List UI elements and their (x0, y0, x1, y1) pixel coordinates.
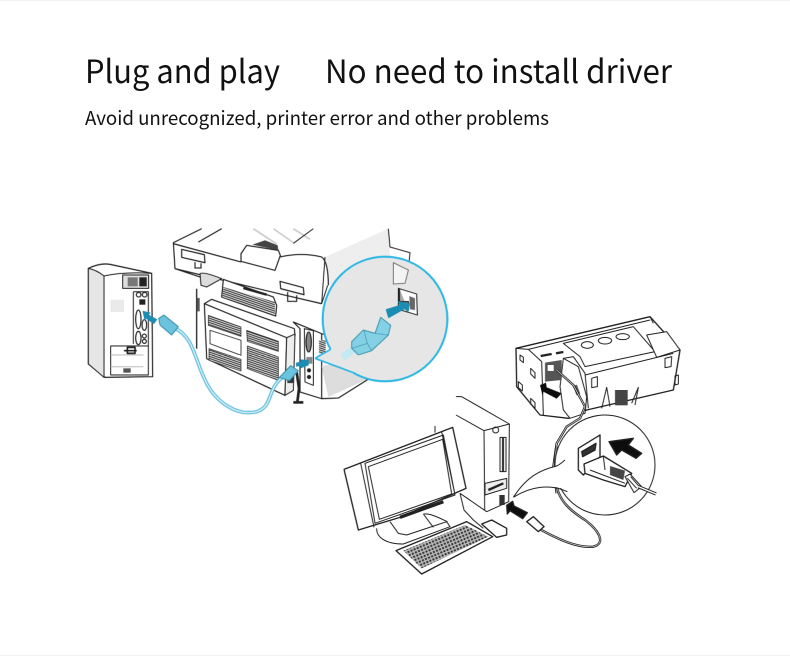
monitor (344, 426, 483, 544)
subtitle: Avoid unrecognized, printer error and other problems (85, 104, 549, 131)
illustration: computer and multifunction printer with blue USB cable (88, 229, 447, 413)
plug arrow (507, 501, 527, 519)
printer body (173, 229, 410, 402)
keyboard (396, 522, 493, 574)
computer tower (88, 264, 153, 377)
mouse (482, 520, 507, 537)
title: Plug and play (85, 47, 280, 93)
title (85, 47, 673, 93)
illustration: desktop computer and inkjet printer with USB cable (344, 317, 680, 574)
magnified USB port callout (513, 415, 656, 515)
inkjet printer (516, 317, 680, 493)
USB cable (527, 447, 600, 547)
magnified connector callout (315, 257, 447, 381)
computer tower (455, 397, 509, 512)
title: No need to install driver (325, 47, 673, 93)
blue USB cable (142, 311, 309, 413)
